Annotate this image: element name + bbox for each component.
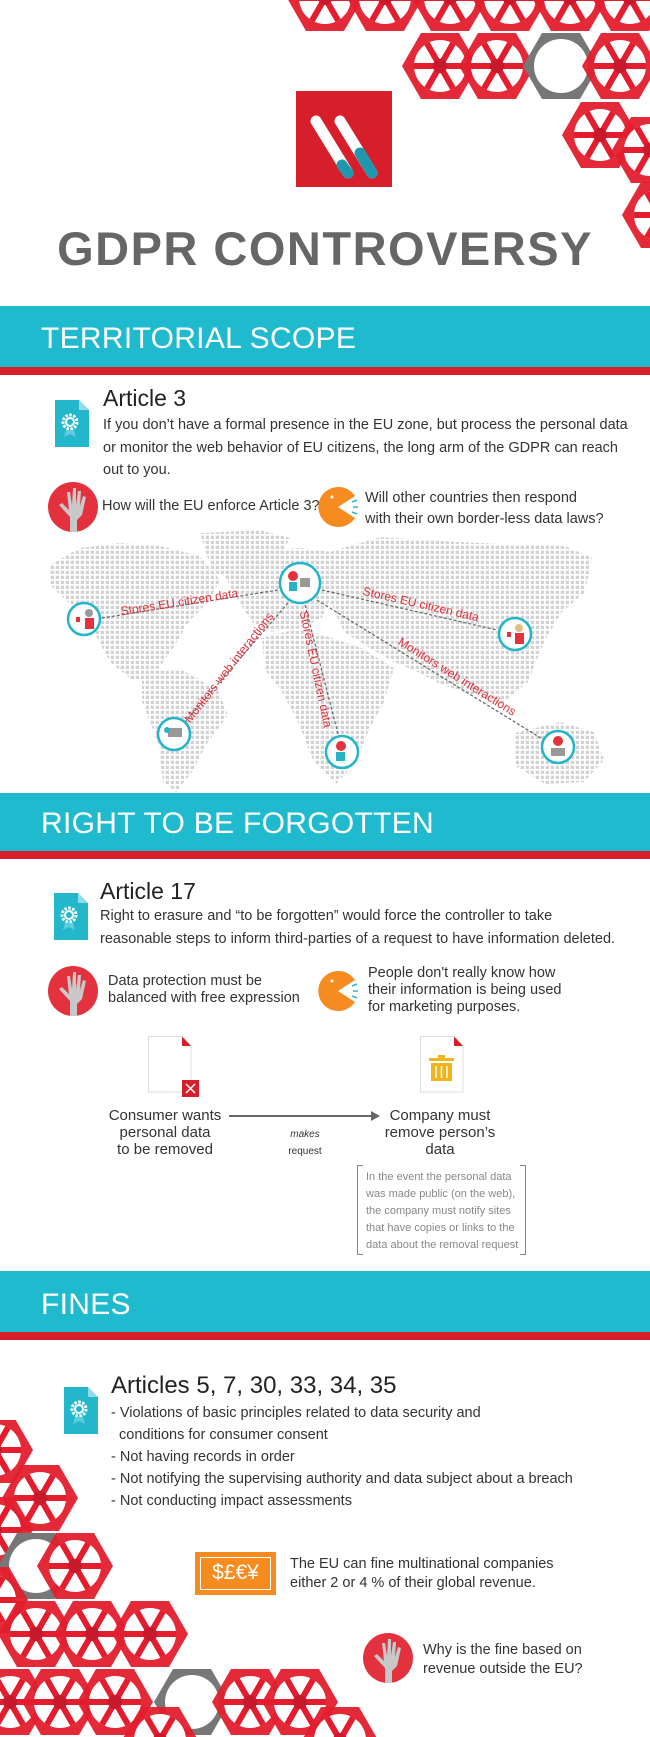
heading: articles 5,7,30,33,34,35: Articles 5, 7, 30, 33, 34, 35: [111, 1372, 397, 1399]
icon: currency box: [195, 1552, 276, 1595]
band: fines: [0, 1271, 650, 1340]
list: violations: - Violations of basic principles related to data security and: [111, 1405, 481, 1421]
world map: [50, 530, 604, 792]
world map: Stores EU citizen data: [297, 610, 335, 729]
callout: bracket note: data about the removal request: [366, 1239, 518, 1251]
text: people don't know: their information is being used: [368, 982, 561, 998]
band: fines: FINES: [41, 1288, 131, 1321]
list: violations: - Not conducting impact assessments: [111, 1493, 352, 1509]
text: fine amount: The EU can fine multinational companies: [290, 1556, 554, 1572]
text: people don't know: People don't really know how: [368, 965, 555, 981]
label: makes request: request: [288, 1146, 322, 1157]
list: violations: - Not notifying the supervising authority and data subject about a breach: [111, 1471, 573, 1487]
question: other countries: with their own border-less data laws?: [365, 511, 604, 527]
callout: bracket note: that have copies or links to the: [366, 1222, 515, 1234]
icon: company document with trash: [420, 1036, 464, 1092]
band: right to be forgotten: RIGHT TO BE FORGOTTEN: [41, 807, 434, 840]
world map: Monitors web interactions: [181, 610, 276, 725]
decoration: top-right hexagon pattern: [288, 0, 650, 248]
band: territorial scope: TERRITORIAL SCOPE: [41, 322, 356, 355]
world map: Stores EU citizen data: [361, 584, 481, 624]
decoration: bottom-left hexagon pattern: [0, 1420, 376, 1737]
text: consumer wants: Consumer wants: [109, 1107, 221, 1124]
band: territorial scope: [0, 306, 650, 375]
text: people don't know: [368, 965, 561, 1015]
text: article 3 body: out to you.: [103, 462, 171, 478]
text: fine amount: either 2 or 4 % of their global revenue.: [290, 1575, 536, 1591]
logo: [296, 91, 392, 187]
icon: articles document: [64, 1387, 98, 1434]
text: article 17 body: [100, 908, 615, 946]
world map: Stores EU citizen data: [120, 586, 239, 618]
text: article 3 body: If you don’t have a formal presence in the EU zone, but process the personal data: [103, 417, 628, 433]
list: violations: conditions for consumer consent: [119, 1427, 328, 1443]
question: other countries: [365, 490, 604, 527]
title: GDPR CONTROVERSY: [57, 222, 593, 275]
arrows: [102, 590, 544, 740]
text: data protection: balanced with free expression: [108, 990, 300, 1006]
text: company must: Company must: [390, 1107, 490, 1124]
question: enforce: How will the EU enforce Article 3?: [102, 498, 320, 514]
band: right to be forgotten: [0, 793, 650, 859]
label: makes request: makes: [290, 1129, 320, 1140]
text: company must: data: [425, 1141, 455, 1158]
label: makes request: [288, 1129, 322, 1157]
icon: hand: [48, 966, 98, 1016]
text: data protection: [108, 973, 300, 1006]
icon: article 3 document: [55, 400, 89, 447]
text: article 3 body: or monitor the web behavior of EU citizens, the long arm of the GDPR can reach: [103, 440, 618, 456]
text: company must: remove person’s: [385, 1124, 495, 1141]
heading: article 17: Article 17: [100, 878, 196, 904]
icon: pacman: [318, 487, 358, 527]
text: people don't know: for marketing purposes.: [368, 999, 520, 1015]
text: article 3 body: [103, 417, 628, 478]
question: other countries: Will other countries then respond: [365, 490, 577, 506]
icon: consumer document with x: [148, 1036, 199, 1097]
text: consumer wants: [109, 1107, 221, 1158]
question: why revenue outside EU: Why is the fine based on: [423, 1642, 582, 1658]
text: fine amount: [290, 1556, 554, 1591]
text: consumer wants: personal data: [120, 1124, 210, 1141]
arrow: makes request: [229, 1111, 380, 1121]
text: article 17 body: Right to erasure and “to be forgotten” would force the controller to take: [100, 908, 552, 924]
list: violations: [111, 1405, 573, 1509]
callout: bracket note: the company must notify sites: [366, 1205, 511, 1217]
icon: hand: [48, 482, 98, 532]
icon: article 17 document: [54, 893, 88, 940]
icon: pacman: [318, 971, 358, 1011]
list: violations: - Not having records in order: [111, 1449, 295, 1465]
text: company must: [385, 1107, 495, 1158]
world map: Monitors web interactions: [396, 635, 519, 719]
question: why revenue outside EU: revenue outside the EU?: [423, 1661, 583, 1677]
text: data protection: Data protection must be: [108, 973, 262, 989]
icon: hand: [363, 1633, 413, 1683]
callout: bracket note: was made public (on the web),: [366, 1188, 515, 1200]
callout: bracket note: In the event the personal data: [366, 1171, 512, 1183]
text: article 17 body: reasonable steps to inform third-parties of a request to have information deleted.: [100, 930, 615, 946]
icon: currency box: $£€¥: [212, 1561, 259, 1584]
callout: bracket note: [357, 1165, 526, 1255]
question: why revenue outside EU: [423, 1642, 583, 1677]
heading: article 3: Article 3: [103, 385, 186, 411]
text: consumer wants: to be removed: [117, 1141, 213, 1158]
